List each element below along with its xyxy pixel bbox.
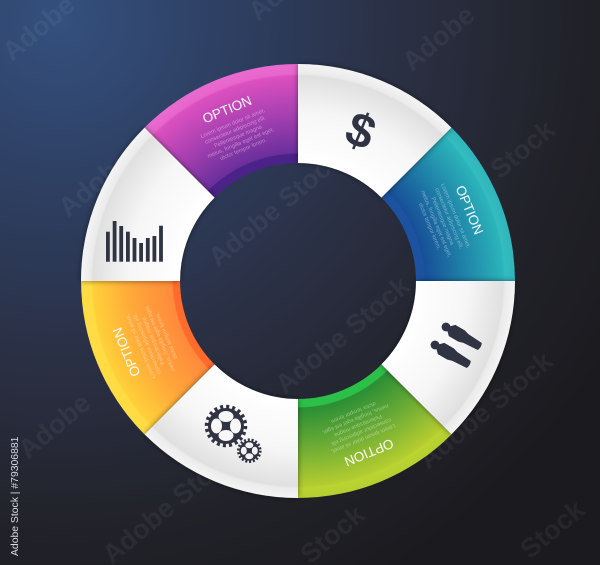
text: green option	[318, 396, 405, 473]
text: orange option: Pellentesque magna	[141, 315, 166, 365]
text: teal option: metus, fringilla eget est eget,	[419, 190, 452, 259]
text: green option: consectetur adipiscing elit.	[329, 416, 392, 447]
text: orange option: dictor tempor lorem.	[154, 311, 179, 359]
panel: white bars	[81, 128, 215, 281]
panel: purple option	[145, 19, 347, 222]
icon: small gear	[238, 440, 260, 462]
watermarks: Adobe Stock	[53, 93, 199, 223]
icon: person two	[428, 337, 473, 371]
watermarks: Adobe	[397, 0, 480, 77]
text: teal option: Pellentesque magna	[430, 197, 455, 247]
icon: large gear	[207, 407, 245, 445]
panel: orange option	[36, 232, 239, 434]
text: orange option	[106, 301, 183, 388]
text: green option: OPTION	[342, 436, 396, 469]
text: green option: Pellentesque magna	[332, 413, 382, 438]
text: purple option: OPTION	[200, 93, 254, 126]
text: orange option: Lorem ipsum dolor sit amet,	[125, 313, 157, 379]
icon: bar chart	[106, 221, 163, 262]
text: purple option	[191, 89, 278, 166]
text: teal option	[413, 174, 490, 261]
text: teal option: dictor tempor lorem.	[417, 203, 442, 251]
text: purple option: dictor tempor lorem.	[220, 137, 268, 162]
text: green option: metus, fringilla eget est eget,	[320, 402, 389, 435]
panel: white people	[381, 281, 515, 434]
icon: people	[428, 319, 484, 371]
text: purple option: Pellentesque magna	[214, 124, 264, 149]
side credit text: Adobe Stock | #79306881	[10, 436, 21, 556]
text: purple option: metus, fringilla eget est eget,	[207, 127, 276, 160]
text: purple option: consectetur adipiscing elit.	[204, 115, 267, 146]
panel: white gears	[145, 364, 298, 498]
text: orange option: OPTION	[110, 325, 143, 379]
text: teal option: Lorem ipsum dolor sit amet,	[439, 183, 471, 249]
text: green option: dictor tempor lorem.	[328, 400, 376, 425]
icon: dollar sign: $	[338, 102, 383, 161]
watermarks: Stock	[515, 494, 591, 565]
text: green option: Lorem ipsum dolor sit amet,	[330, 422, 396, 454]
text: orange option: metus, fringilla eget est eget,	[144, 303, 177, 372]
watermarks: Adobe Stock	[413, 345, 559, 475]
text: orange option: consectetur adipiscing elit.	[132, 312, 163, 375]
watermarks: Stock	[485, 114, 561, 185]
panel: teal option	[357, 128, 560, 330]
text: purple option: Lorem ipsum dolor sit amet,	[200, 108, 266, 140]
watermarks: Adobe Stock	[270, 270, 416, 400]
text: teal option: OPTION	[453, 183, 486, 237]
icon: person one	[439, 319, 484, 353]
watermarks: Adobe	[13, 388, 96, 465]
watermarks: Adobe Stock	[203, 143, 349, 273]
icon: gears	[207, 407, 260, 462]
panel: green option	[249, 340, 451, 543]
panel: white dollar	[298, 64, 451, 198]
text: teal option: consectetur adipiscing elit.	[433, 187, 464, 250]
